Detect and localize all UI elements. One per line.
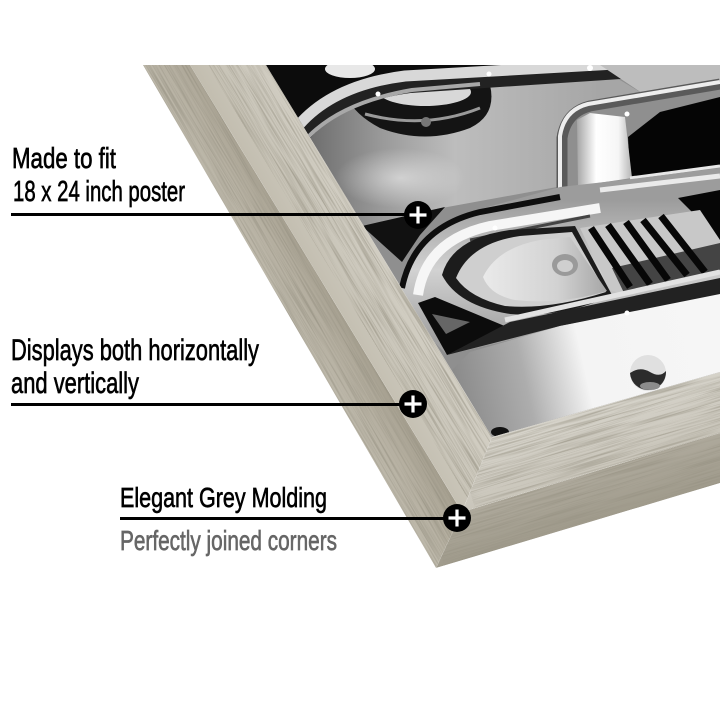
turn signal dark bezel (442, 226, 612, 315)
chrome droplet (630, 355, 666, 391)
icon: plus marker (404, 201, 432, 229)
black lower right under window (678, 190, 720, 240)
leader line (11, 403, 406, 406)
callout text: and vertically (11, 367, 139, 400)
black wedge behind fender (362, 207, 445, 262)
bottom outer face (436, 433, 720, 568)
turn signal lens (483, 237, 607, 301)
poster photo: classic car chrome (260, 60, 720, 440)
heading text: Elegant Grey Molding (120, 482, 327, 513)
headlight lens top (325, 65, 375, 78)
left outer face (143, 65, 457, 568)
callout: displays both ways (11, 334, 427, 418)
fender chrome block (398, 168, 720, 355)
icon: plus marker (399, 390, 427, 418)
chrome arc band (300, 68, 620, 133)
grille backing (580, 210, 720, 272)
headlight bezel (354, 88, 492, 136)
black wedge under fender (418, 297, 507, 355)
callout text (11, 334, 259, 400)
dark speck at poster corner (491, 427, 509, 437)
callout text: Made to fit (12, 143, 116, 175)
fender chrome highlights (402, 197, 560, 288)
picture frame molding (143, 65, 720, 568)
callout text (12, 143, 185, 208)
callout: made to fit (11, 143, 432, 229)
left inner face (190, 65, 492, 506)
callout text: 18 x 24 inch poster (13, 176, 185, 208)
grille bars (591, 216, 705, 287)
callout: molding (120, 482, 471, 556)
hood panel upper right (600, 65, 720, 95)
black upper left behind headlight (266, 65, 498, 124)
lower car body (452, 294, 720, 437)
sparkles (376, 65, 630, 316)
leader line (11, 213, 411, 216)
white pillar (577, 113, 632, 186)
leader line (120, 517, 450, 520)
lower chrome strip (447, 278, 720, 355)
subheading text: Perfectly joined corners (120, 525, 337, 556)
icon: plus marker (443, 504, 471, 532)
window chrome surround (562, 84, 720, 190)
window black (628, 97, 720, 178)
callout text: Displays both horizontally (11, 334, 259, 367)
body panel grey (300, 68, 645, 225)
bottom inner face (464, 372, 720, 510)
